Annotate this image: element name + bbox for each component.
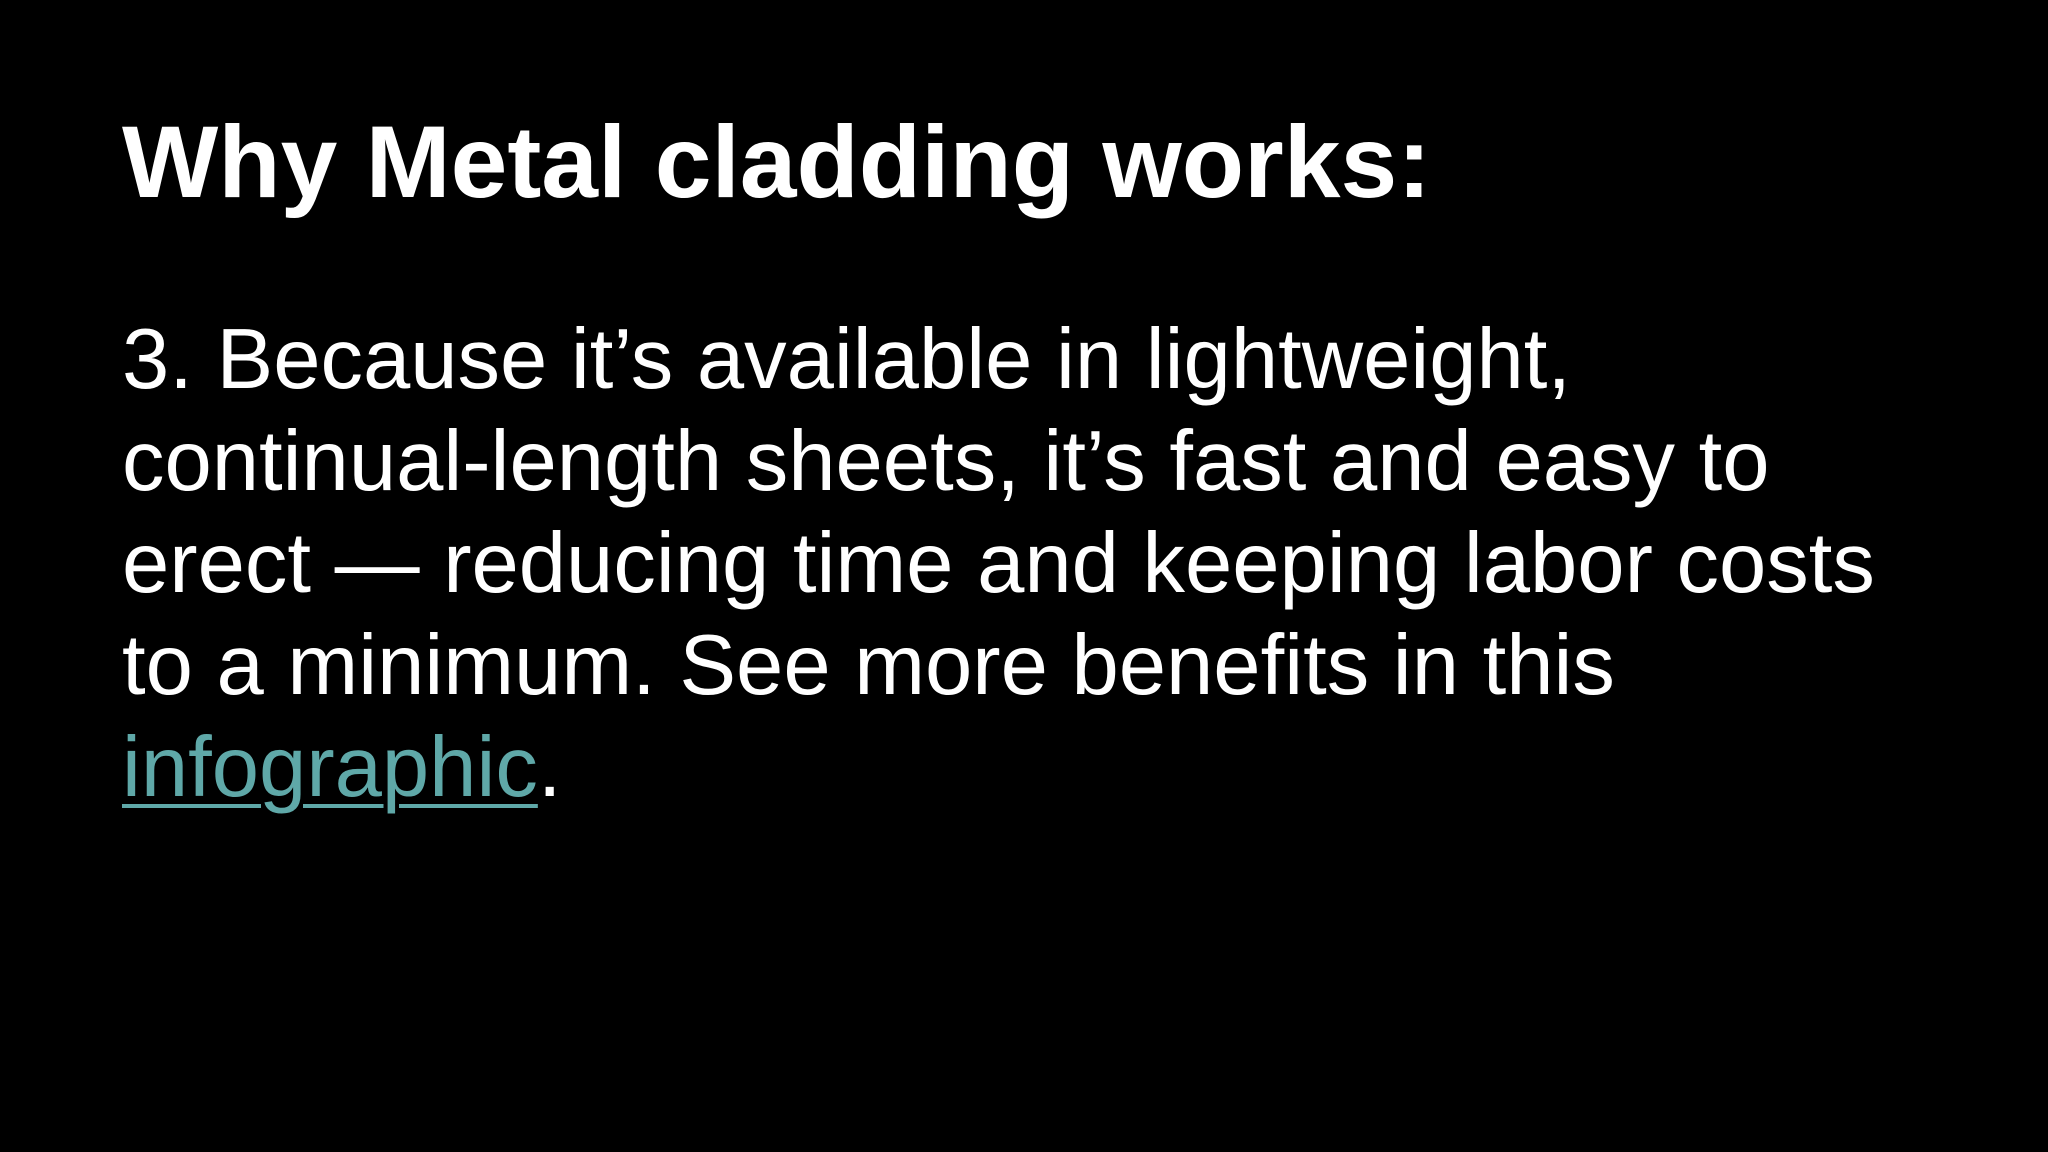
title: Why Metal cladding works:	[122, 105, 1431, 219]
text block: benefit 3: to a minimum. See more benefits in this	[122, 618, 1615, 713]
text block: benefit 3: erect — reducing time and keeping labor costs	[122, 516, 1875, 611]
text block: benefit 3	[122, 312, 1875, 815]
text block: benefit 3: 3. Because it’s available in lightweight,	[122, 312, 1571, 407]
text block: benefit 3: infographic.	[122, 720, 561, 815]
text block: benefit 3: continual-length sheets, it’s fast and easy to	[122, 414, 1770, 509]
